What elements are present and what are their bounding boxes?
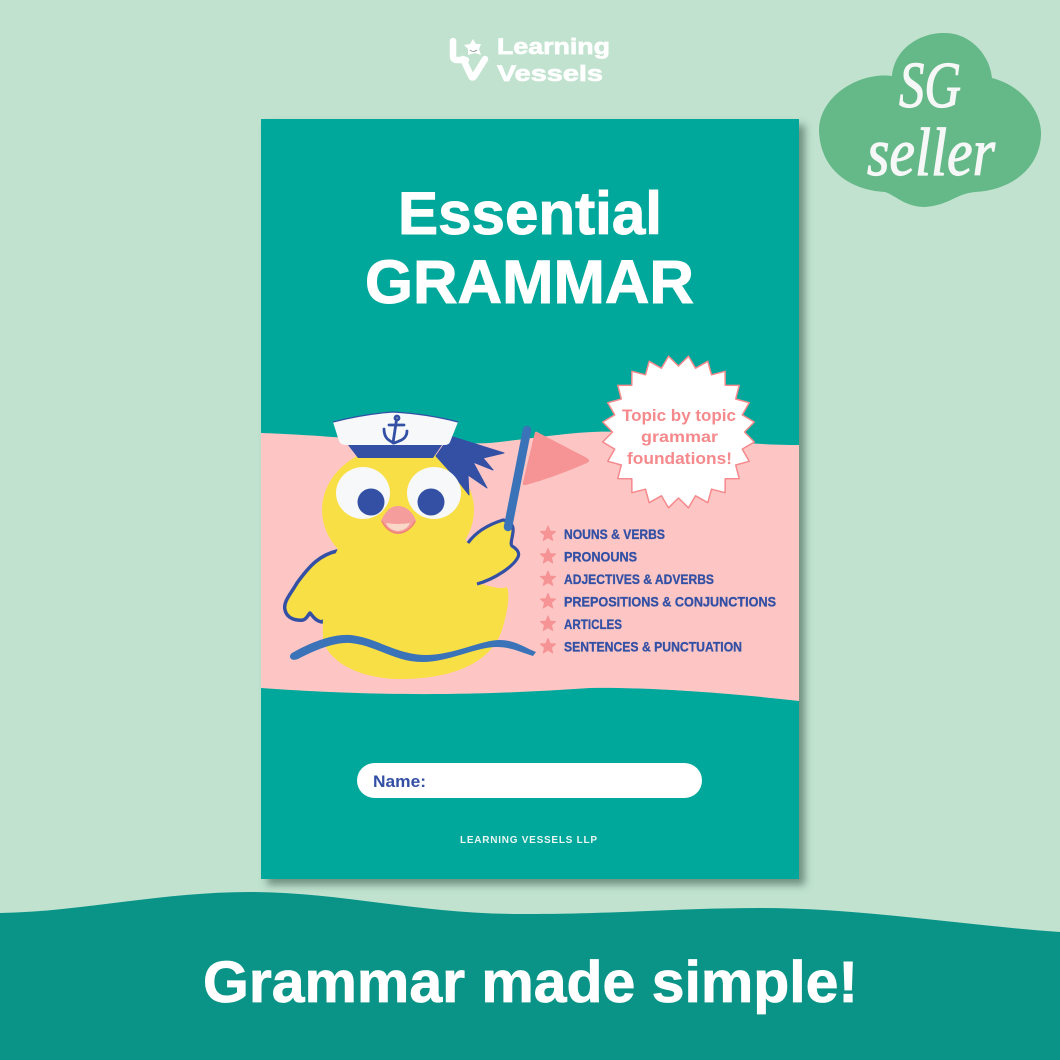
flag pole — [508, 430, 527, 527]
callout: starburst: grammar — [641, 429, 718, 446]
flag — [523, 432, 589, 485]
heading: Essential GRAMMAR: Essential — [398, 180, 662, 247]
footer wave band — [0, 892, 1060, 1060]
hat feathers — [436, 436, 504, 495]
eyes — [336, 467, 461, 519]
list item: pronouns: PRONOUNS — [564, 550, 637, 564]
left wing — [285, 551, 350, 622]
callout: starburst: foundations! — [627, 449, 732, 468]
pink wave band — [261, 432, 799, 701]
right wing — [440, 520, 519, 584]
list item: nouns and verbs: NOUNS & VERBS — [564, 527, 665, 542]
icon: anchor — [384, 416, 407, 443]
water wave — [290, 635, 536, 662]
heading: Essential GRAMMAR — [365, 180, 694, 316]
logo: Learning Vessels — [453, 34, 610, 86]
badge: SG seller cloud — [819, 33, 1041, 207]
list item: prepositions and conjunctions: PREPOSITIONS & CONJUNCTIONS — [564, 594, 776, 610]
heading: Essential GRAMMAR: GRAMMAR — [365, 248, 694, 316]
callout: starburst — [603, 356, 754, 508]
tagline: Grammar made simple!: Grammar made simple! — [203, 950, 858, 1015]
panel: book cover — [261, 119, 799, 879]
list item: pronouns — [540, 548, 637, 564]
list item: adjectives and adverbs: ADJECTIVES & ADVERBS — [564, 572, 714, 587]
badge: SG seller cloud: SG — [899, 49, 961, 122]
beak — [381, 506, 416, 534]
name field: Name: — [373, 772, 426, 791]
illustration: duck sailor with flag — [285, 412, 589, 679]
callout: starburst: Topic by topic — [622, 406, 736, 425]
topic list — [540, 526, 776, 654]
list item: articles: ARTICLES — [564, 617, 622, 632]
name field — [357, 763, 702, 798]
publisher credit: LEARNING VESSELS LLP — [460, 835, 597, 846]
list item: articles — [540, 616, 622, 632]
logo: Learning Vessels: Learning — [497, 34, 610, 59]
logo: Learning Vessels: Vessels — [497, 61, 603, 86]
badge: SG seller cloud: seller — [867, 114, 995, 190]
list item: nouns and verbs — [540, 526, 665, 542]
hat top — [333, 412, 458, 445]
duck body — [323, 530, 508, 679]
duck head — [322, 446, 474, 574]
list item: sentences and punctuation: SENTENCES & PUNCTUATION — [564, 640, 742, 654]
hat band — [348, 445, 442, 458]
